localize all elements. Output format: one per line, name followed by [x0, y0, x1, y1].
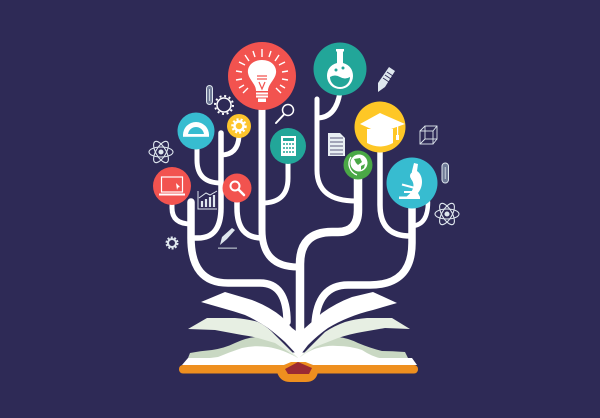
icon: paperclip right: [442, 163, 448, 183]
tree branches: [172, 92, 428, 340]
white page infill: [188, 346, 412, 362]
icon: fountain pen: [218, 228, 237, 249]
circle: graduation cap: [354, 102, 406, 152]
icon: outline gear: [215, 96, 233, 114]
circle: light bulb: [228, 42, 296, 110]
circle: laptop: [153, 167, 191, 205]
icon: small gear: [166, 238, 178, 248]
circle: magnifier: [222, 174, 252, 202]
circle: calculator: [270, 128, 306, 164]
lifted white pages: [201, 292, 300, 358]
icon: document: [328, 133, 345, 156]
page block: [182, 352, 417, 365]
circle: globe: [344, 150, 372, 180]
circle: microscope: [386, 158, 438, 208]
open book: [179, 292, 418, 382]
spine inset: [285, 362, 312, 374]
book spine badge: [277, 358, 318, 382]
icon: outline magnifier: [276, 104, 294, 123]
icon: wireframe cube: [420, 126, 437, 144]
icon: bar chart: [198, 191, 217, 209]
icon: atom left: [149, 139, 173, 165]
icon: atom right: [435, 201, 459, 227]
icon: paperclip left: [206, 86, 212, 104]
circle: protractor: [178, 112, 214, 150]
icon: pencil: [378, 67, 395, 92]
pale pages: [188, 318, 298, 358]
circle: yellow gear: [227, 114, 251, 138]
circle: flask: [314, 42, 366, 96]
book cover: [179, 365, 418, 374]
darker lower pages: [188, 336, 298, 358]
